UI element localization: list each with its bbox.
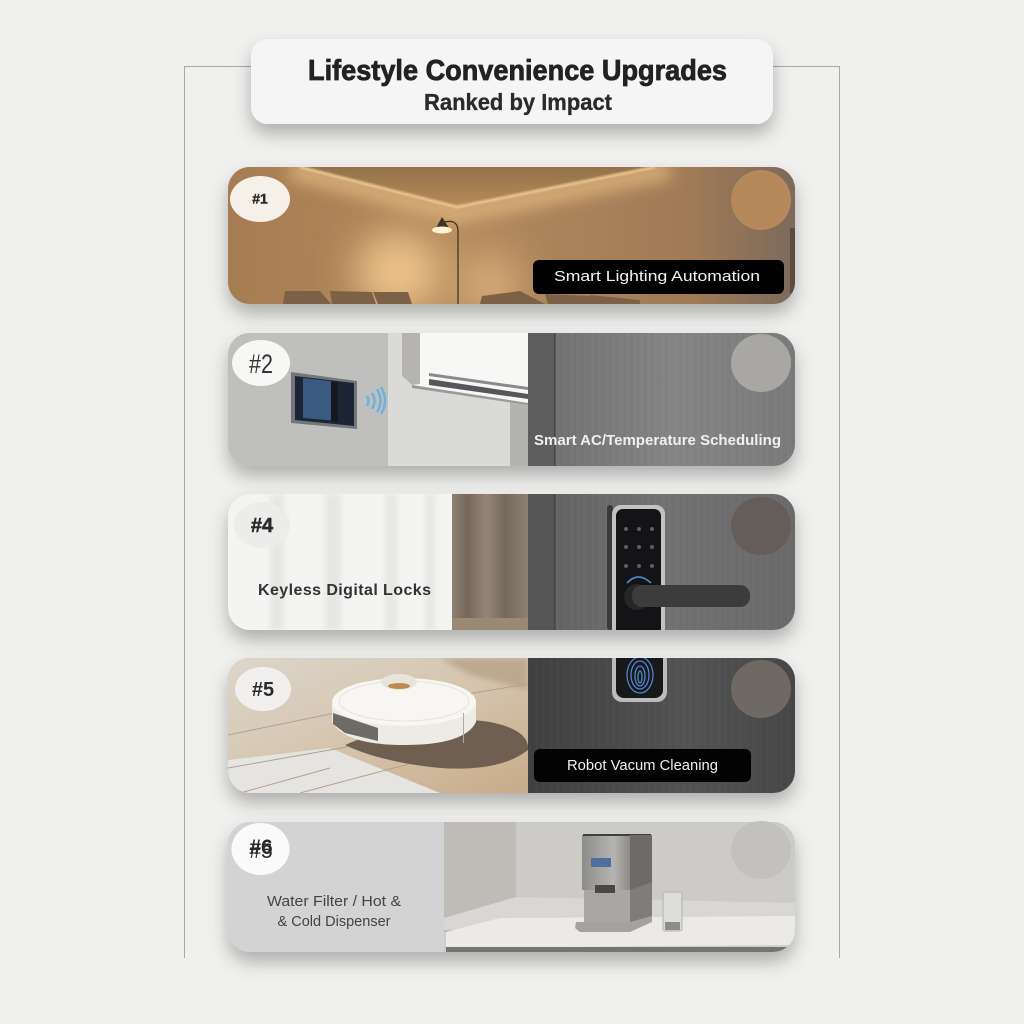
thermostat xyxy=(291,372,357,429)
photo: curtains and door lock xyxy=(228,494,795,639)
rank badge #6 xyxy=(232,823,290,875)
panel: smart AC scheduling xyxy=(228,333,795,466)
rank badge #5 xyxy=(235,667,291,711)
subtitle: Ranked by Impact xyxy=(424,89,612,115)
glass xyxy=(663,892,682,931)
robot vacuum xyxy=(332,674,476,745)
corner circle xyxy=(731,660,791,718)
rank badge #4 xyxy=(234,502,290,548)
label xyxy=(534,749,751,782)
photo: water dispenser on counter xyxy=(444,822,795,952)
panel: robot vacuum cleaning xyxy=(228,650,795,793)
panel: water filter dispenser xyxy=(228,821,795,952)
label: Smart AC/Temperature Scheduling xyxy=(534,433,781,449)
label: Water Filter / Hot & xyxy=(267,894,401,910)
corner circle xyxy=(731,170,791,230)
rank badge #5: #5 xyxy=(252,679,274,701)
rank badge #6: #6 xyxy=(249,836,273,859)
rank badge #4: #4 xyxy=(251,515,274,537)
air conditioner xyxy=(402,333,528,405)
photo: robot vacuum on wood floor xyxy=(228,650,795,793)
corner circle xyxy=(731,821,791,879)
label: & Cold Dispenser xyxy=(278,914,391,930)
label: Robot Vacum Cleaning xyxy=(567,758,718,774)
rank badge #1 xyxy=(230,176,290,222)
photo: warm lit room xyxy=(228,167,795,315)
icon: wireless waves xyxy=(367,387,385,414)
title card xyxy=(251,39,773,124)
corner circle xyxy=(731,497,791,555)
fingerprint lock xyxy=(612,658,667,702)
panel: smart lighting automation xyxy=(228,167,795,315)
photo: thermostat and air conditioner xyxy=(228,333,795,466)
label: Keyless Digital Locks xyxy=(258,582,431,599)
water dispenser xyxy=(575,834,652,932)
title: Lifestyle Convenience Upgrades xyxy=(308,55,727,87)
corner circle xyxy=(731,334,791,392)
smart lock xyxy=(607,505,750,639)
label xyxy=(533,260,784,294)
frame outline xyxy=(184,66,840,958)
rank badge #6: #5 xyxy=(249,840,273,863)
rank badge #2: #2 xyxy=(249,349,273,379)
label xyxy=(267,894,401,930)
rank badge #1: #1 xyxy=(252,190,268,206)
panel: keyless digital locks xyxy=(228,494,795,639)
rank badge #2 xyxy=(232,340,290,386)
label: Smart Lighting Automation xyxy=(554,268,760,285)
